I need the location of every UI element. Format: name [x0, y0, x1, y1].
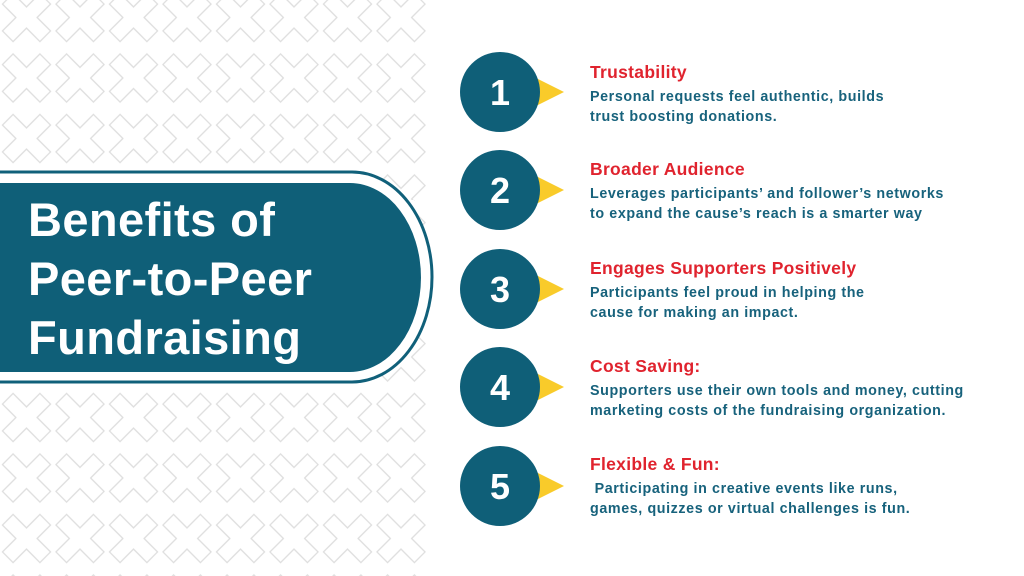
item 2: [460, 150, 944, 230]
title: Fundraising: [28, 311, 301, 364]
item 1: Trustability: [590, 62, 687, 82]
item 5: [460, 446, 910, 526]
item 4: Cost Saving:: [590, 356, 701, 376]
item 5: 5: [490, 466, 510, 507]
item 4: marketing costs of the fundraising organization.: [590, 403, 946, 419]
item 3: Engages Supporters Positively: [590, 258, 856, 278]
item 4: [460, 347, 964, 427]
item 2: to expand the cause’s reach is a smarter way: [590, 206, 923, 222]
item 3: [460, 249, 865, 329]
background pattern: [2, 0, 426, 576]
title: [28, 193, 312, 364]
item 4: Supporters use their own tools and money, cutting: [590, 383, 964, 399]
item 3: 3: [490, 269, 510, 310]
item 1: trust boosting donations.: [590, 109, 777, 125]
item 2: Leverages participants’ and follower’s networks: [590, 186, 944, 202]
item 4: 4: [490, 367, 510, 408]
title: Peer-to-Peer: [28, 252, 312, 305]
title: Benefits of: [28, 193, 275, 246]
item 3: Participants feel proud in helping the: [590, 285, 865, 301]
item 1: Personal requests feel authentic, builds: [590, 89, 884, 105]
item 5: Participating in creative events like runs,: [595, 481, 898, 497]
title banner: [0, 170, 434, 384]
item 5: Flexible & Fun:: [590, 454, 720, 474]
item 5: games, quizzes or virtual challenges is fun.: [590, 501, 910, 517]
item 1: [460, 52, 884, 132]
item 2: 2: [490, 170, 510, 211]
item 2: Broader Audience: [590, 159, 745, 179]
item 1: 1: [490, 72, 510, 113]
item 3: cause for making an impact.: [590, 305, 798, 321]
